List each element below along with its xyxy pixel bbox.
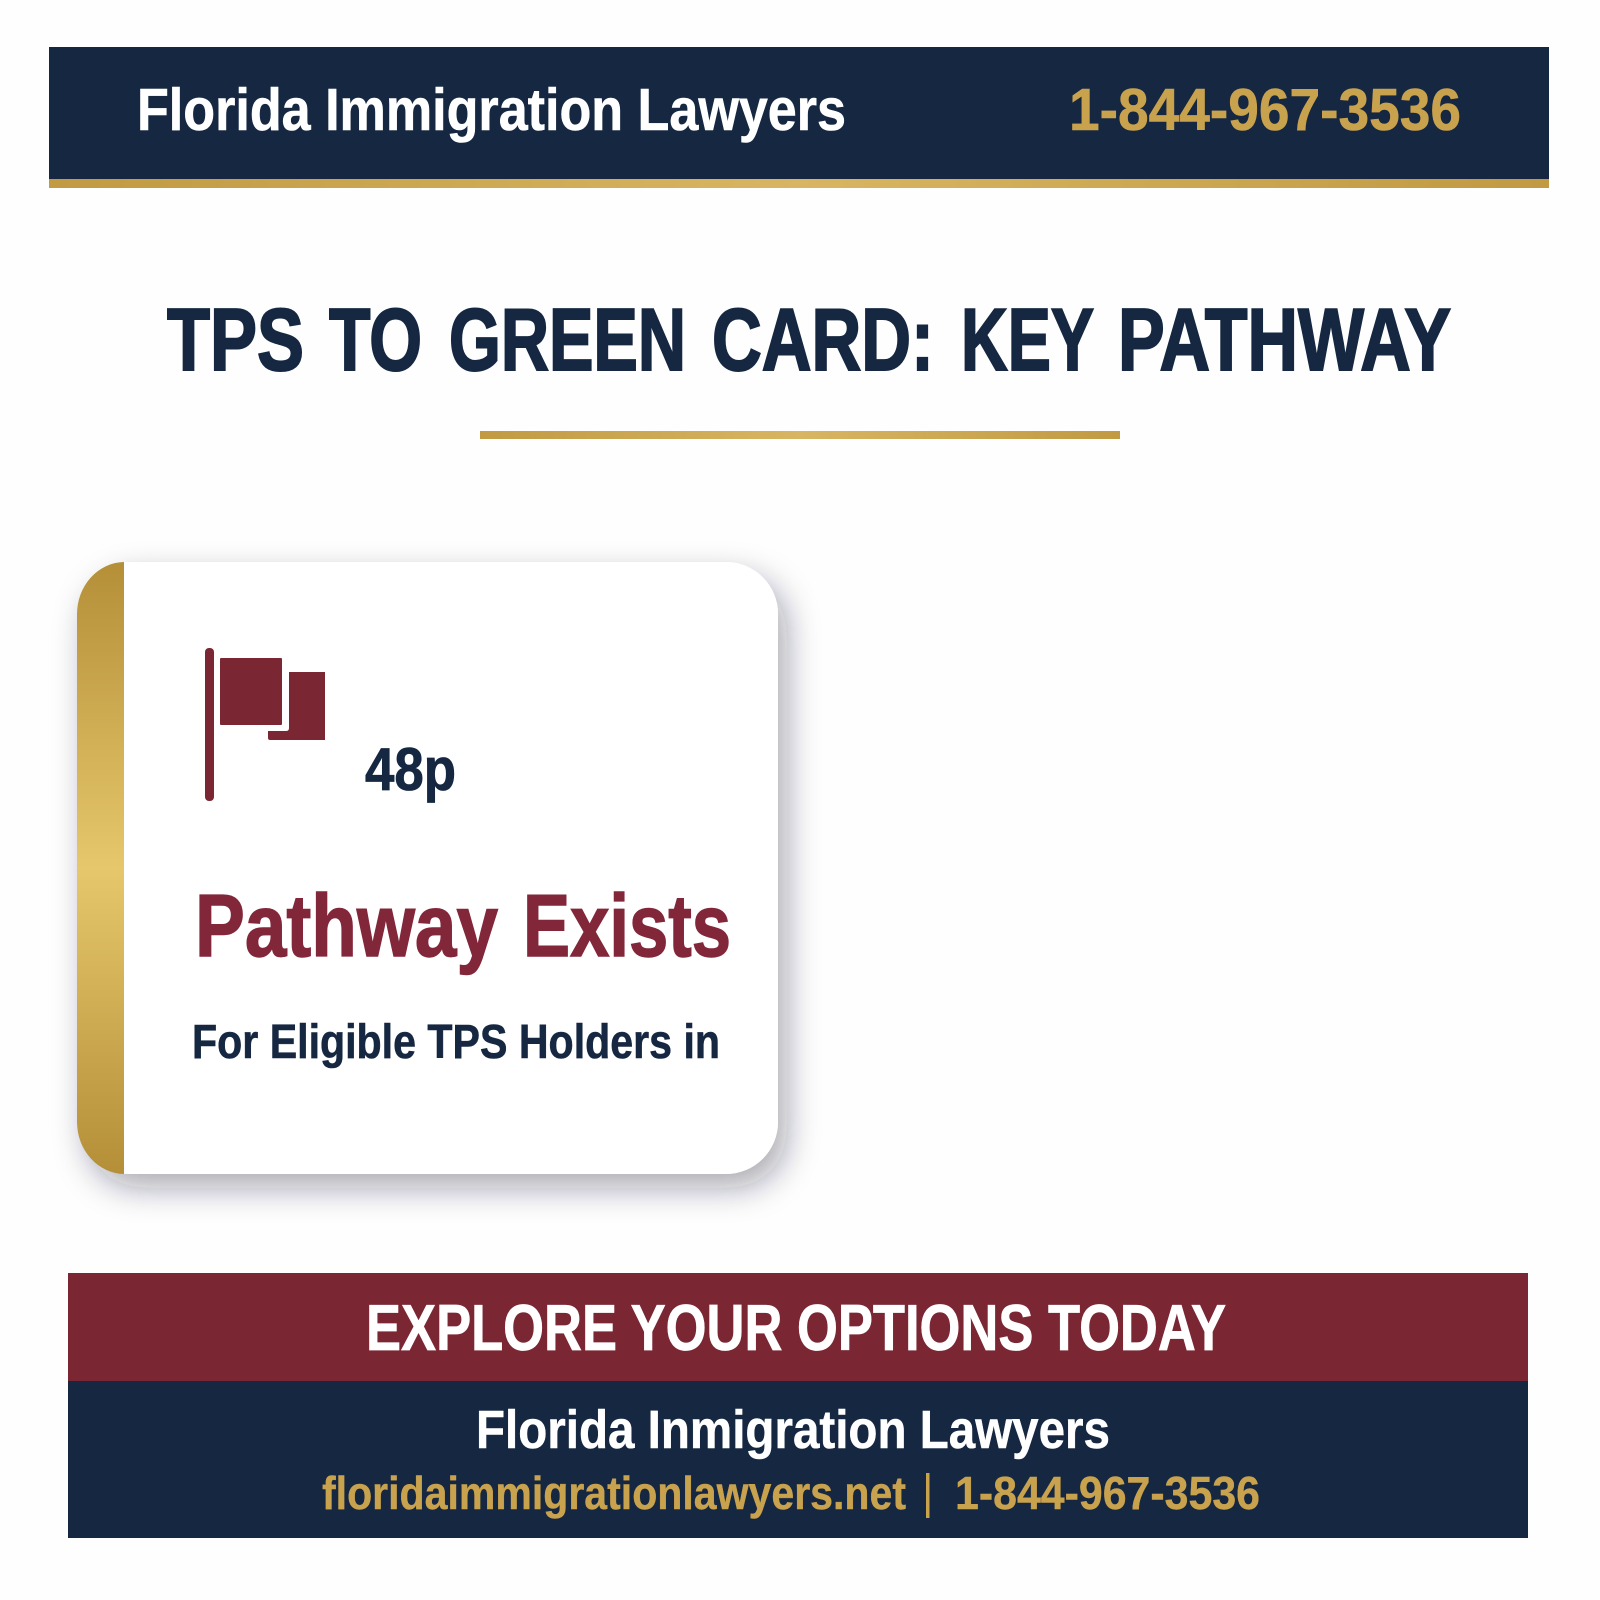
stray size label: 48p (365, 736, 456, 803)
card description: For Eligible TPS Holders in (192, 1016, 720, 1069)
title: GREEN (449, 290, 686, 389)
title: KEY (961, 290, 1094, 389)
call to action text: EXPLORE YOUR OPTIONS TODAY (366, 1291, 1226, 1364)
icon: flag (205, 648, 325, 801)
title: TPS (167, 290, 304, 389)
panel: pathway card (77, 562, 778, 1174)
footer firm name: Florida Inmigration Lawyers (476, 1400, 1110, 1460)
footer separator (926, 1473, 930, 1518)
title: CARD: (712, 290, 934, 389)
card heading (195, 876, 731, 975)
footer website: floridaimmigrationlawyers.net (322, 1467, 906, 1519)
header firm name: Florida Immigration Lawyers (137, 77, 846, 143)
title (167, 290, 1451, 389)
title: TO (329, 290, 422, 389)
header phone number: 1-844-967-3536 (1069, 77, 1461, 143)
title underline (480, 431, 1120, 439)
footer call to action banner (68, 1273, 1528, 1381)
card heading: Exists (523, 876, 731, 975)
card heading: Pathway (195, 876, 498, 975)
footer phone number: 1-844-967-3536 (955, 1467, 1260, 1519)
footer contact panel (68, 1381, 1528, 1538)
title: PATHWAY (1118, 290, 1451, 389)
card gold side bar (77, 562, 124, 1174)
header banner (49, 47, 1549, 188)
